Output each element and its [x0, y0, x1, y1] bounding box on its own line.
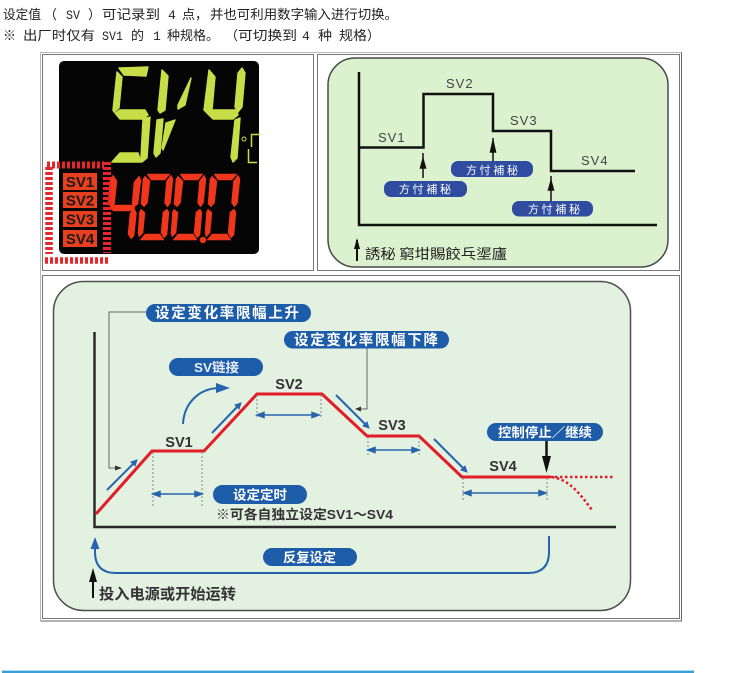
intro text: SV1 — [102, 29, 123, 44]
intro text: 并也可利用数字输入进行切换。 — [210, 7, 398, 23]
intro text: （ — [225, 29, 238, 44]
pill: SV link — [169, 358, 263, 376]
SV selector tabs — [63, 173, 97, 248]
ramp line — [96, 394, 550, 514]
pill: rate up: 设定变化率限幅上升 — [155, 304, 299, 322]
panel background — [328, 58, 668, 267]
intro text: ※ — [3, 29, 16, 44]
panel: controller display — [45, 61, 260, 260]
intro text: ） — [367, 29, 380, 44]
intro text — [3, 7, 398, 44]
connector lines — [109, 312, 367, 468]
SV selector tabs: SV3 — [66, 212, 94, 228]
legend — [354, 238, 507, 264]
SV labels: SV4 — [489, 459, 517, 475]
display background — [59, 61, 259, 254]
legend: 誘秘 窮坩賜餃乓埿廬 — [365, 244, 507, 264]
callout pills — [384, 161, 593, 216]
red dashed highlight — [45, 162, 110, 260]
callout pills: 方 忖 補 秘 — [399, 182, 451, 196]
dotted continuation — [550, 477, 615, 510]
SV selector tabs: SV4 — [66, 231, 95, 248]
unit symbol — [242, 134, 260, 162]
SV selector tabs: SV2 — [66, 192, 94, 210]
timing guides — [153, 395, 547, 508]
repeat loop arrow — [90, 536, 549, 573]
intro text: 1 — [153, 29, 161, 44]
pill: control stop: 控制停止／继续 — [498, 425, 592, 440]
SV selector tabs: SV1 — [66, 174, 94, 191]
SV labels: SV4 — [581, 153, 609, 168]
pill: repeat — [263, 548, 357, 566]
pill: timer — [213, 485, 307, 504]
bottom bar — [2, 670, 694, 673]
up arrows — [420, 138, 554, 201]
timing arrows — [153, 412, 546, 496]
intro text: SV — [66, 8, 80, 23]
intro text: 4 — [168, 8, 176, 23]
panel background — [54, 282, 630, 610]
intro text: 种规格。 — [167, 28, 219, 44]
SV labels: SV2 — [446, 76, 474, 91]
pill: control stop — [487, 423, 603, 441]
panel: step chart — [328, 58, 668, 267]
rate arrows — [107, 395, 467, 490]
red digits: 400.0 — [108, 174, 240, 243]
SV labels: SV3 — [378, 418, 406, 434]
SV labels: SV3 — [510, 113, 538, 128]
intro text: 规格 — [339, 28, 367, 44]
intro text: 设定值 — [3, 7, 41, 23]
intro text: 种 — [318, 29, 332, 44]
callout pills: 方 忖 補 秘 — [466, 163, 518, 177]
outer table frame — [40, 52, 682, 621]
SV labels: SV2 — [275, 377, 303, 393]
pill: SV link: SV链接 — [194, 360, 239, 375]
pill: timer: 设定定时 — [233, 488, 287, 502]
note: ※可各自独立设定SV1～SV4 — [216, 507, 394, 522]
yellow digits: SV4 — [112, 67, 245, 162]
stop arrow — [542, 441, 551, 473]
intro text: ） — [88, 8, 101, 23]
panel: ramp chart — [54, 282, 630, 610]
intro text: 的 — [131, 28, 144, 44]
step line — [359, 94, 635, 171]
SV labels — [378, 76, 609, 168]
axes — [359, 72, 657, 225]
intro text: 4 — [302, 29, 310, 44]
axes — [94, 332, 616, 527]
intro text: 出厂时仅有 — [23, 29, 95, 44]
power-on label: 投入电源或开始运转 — [99, 585, 236, 603]
intro text: 可切换到 — [238, 29, 297, 44]
power-on arrow — [89, 568, 97, 598]
SV labels: SV1 — [165, 435, 193, 451]
intro text: 点， — [182, 8, 208, 23]
pill: repeat: 反复设定 — [283, 550, 336, 565]
pill: rate down: 设定变化率限幅下降 — [294, 331, 438, 349]
SV link curved arrow — [183, 383, 230, 424]
intro text: （ — [44, 8, 57, 23]
SV labels — [165, 377, 517, 475]
intro text: 可记录到 — [102, 8, 160, 23]
callout pills: 方 忖 補 秘 — [528, 202, 580, 216]
SV labels: SV1 — [378, 130, 406, 145]
